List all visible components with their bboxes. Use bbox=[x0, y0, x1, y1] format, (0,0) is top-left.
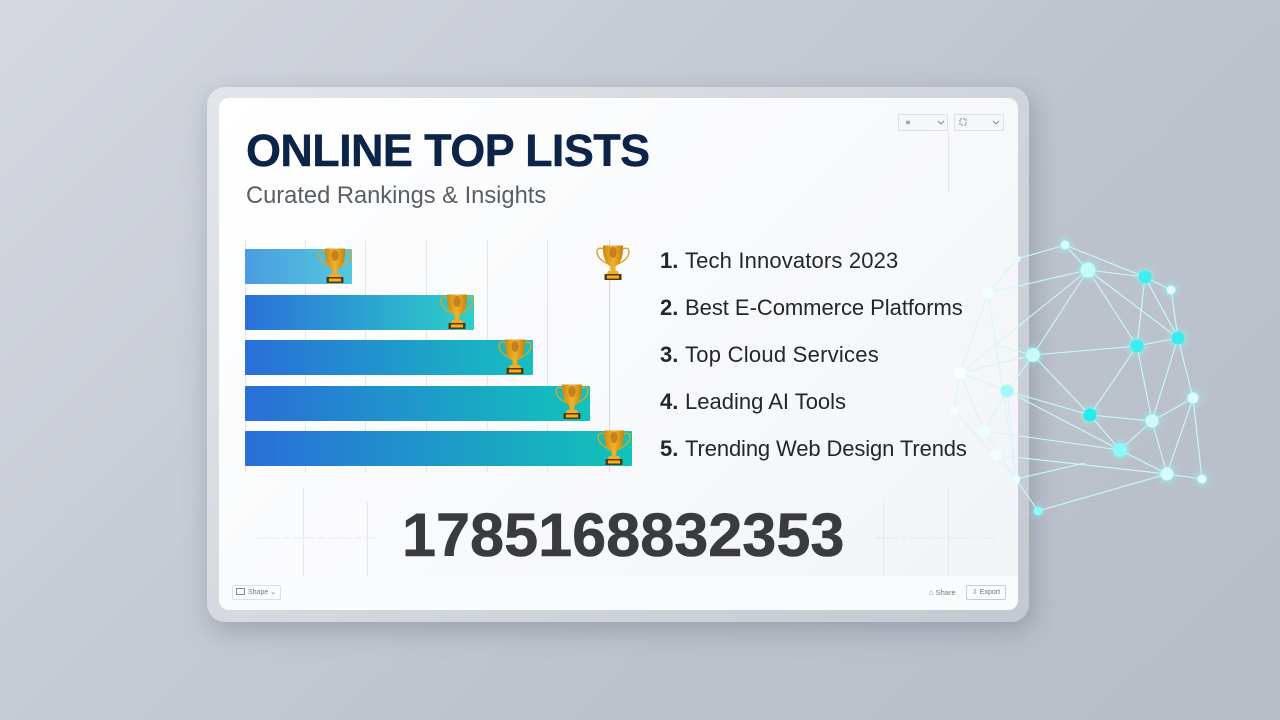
panel: main card bbox=[219, 98, 1018, 610]
list item 4: 4. bbox=[660, 389, 678, 414]
list item 1: Tech Innovators 2023 bbox=[685, 248, 898, 273]
bar chart with trophies bbox=[245, 240, 610, 472]
bar 3 bbox=[245, 340, 533, 375]
subtitle: Curated Rankings & Insights bbox=[246, 183, 546, 209]
icon: trophy bar 3 bbox=[499, 340, 531, 374]
bar 5 bbox=[245, 431, 632, 466]
icon: trophy bar 5 bbox=[598, 430, 630, 465]
list item 2: Best E-Commerce Platforms bbox=[685, 295, 963, 320]
network lines bbox=[954, 245, 1202, 511]
footer button: shape: Shape ⌄ bbox=[248, 589, 276, 596]
list item 5: 5. bbox=[660, 436, 678, 461]
footer action: share: ⌂ Share bbox=[929, 588, 956, 597]
title: ONLINE TOP LISTS bbox=[246, 125, 649, 176]
icon: trophy bar 2 bbox=[441, 294, 473, 329]
footer button: shape bbox=[232, 585, 281, 600]
icon: trophy bar 1 bbox=[319, 248, 351, 283]
icon: trophy top bbox=[597, 246, 629, 280]
dropdown: right bbox=[954, 114, 1004, 131]
list item 3: 3. bbox=[660, 342, 678, 367]
bar 1 bbox=[245, 249, 352, 284]
ranked list bbox=[660, 248, 967, 461]
panel: outer frame bbox=[207, 87, 1029, 622]
footer strip bbox=[219, 576, 1018, 610]
footer button: export: ⇩ Export bbox=[972, 589, 1000, 596]
bar 2 bbox=[245, 295, 474, 330]
list item 1: 1. bbox=[660, 248, 678, 273]
icon: trophy bar 4 bbox=[556, 384, 588, 419]
guide line under dropdowns bbox=[948, 131, 949, 193]
big number: 1785168832353 bbox=[402, 501, 844, 569]
list item 5: Trending Web Design Trends bbox=[685, 436, 967, 461]
network node glows bbox=[1025, 239, 1208, 516]
list item 4: Leading AI Tools bbox=[685, 389, 846, 414]
network nodes bbox=[950, 240, 1206, 516]
list item 2: 2. bbox=[660, 295, 678, 320]
bar 4 bbox=[245, 386, 590, 421]
footer button: export bbox=[966, 585, 1006, 600]
dropdown: left bbox=[898, 114, 948, 131]
list item 3: Top Cloud Services bbox=[685, 342, 879, 367]
network globe bbox=[954, 237, 1210, 518]
